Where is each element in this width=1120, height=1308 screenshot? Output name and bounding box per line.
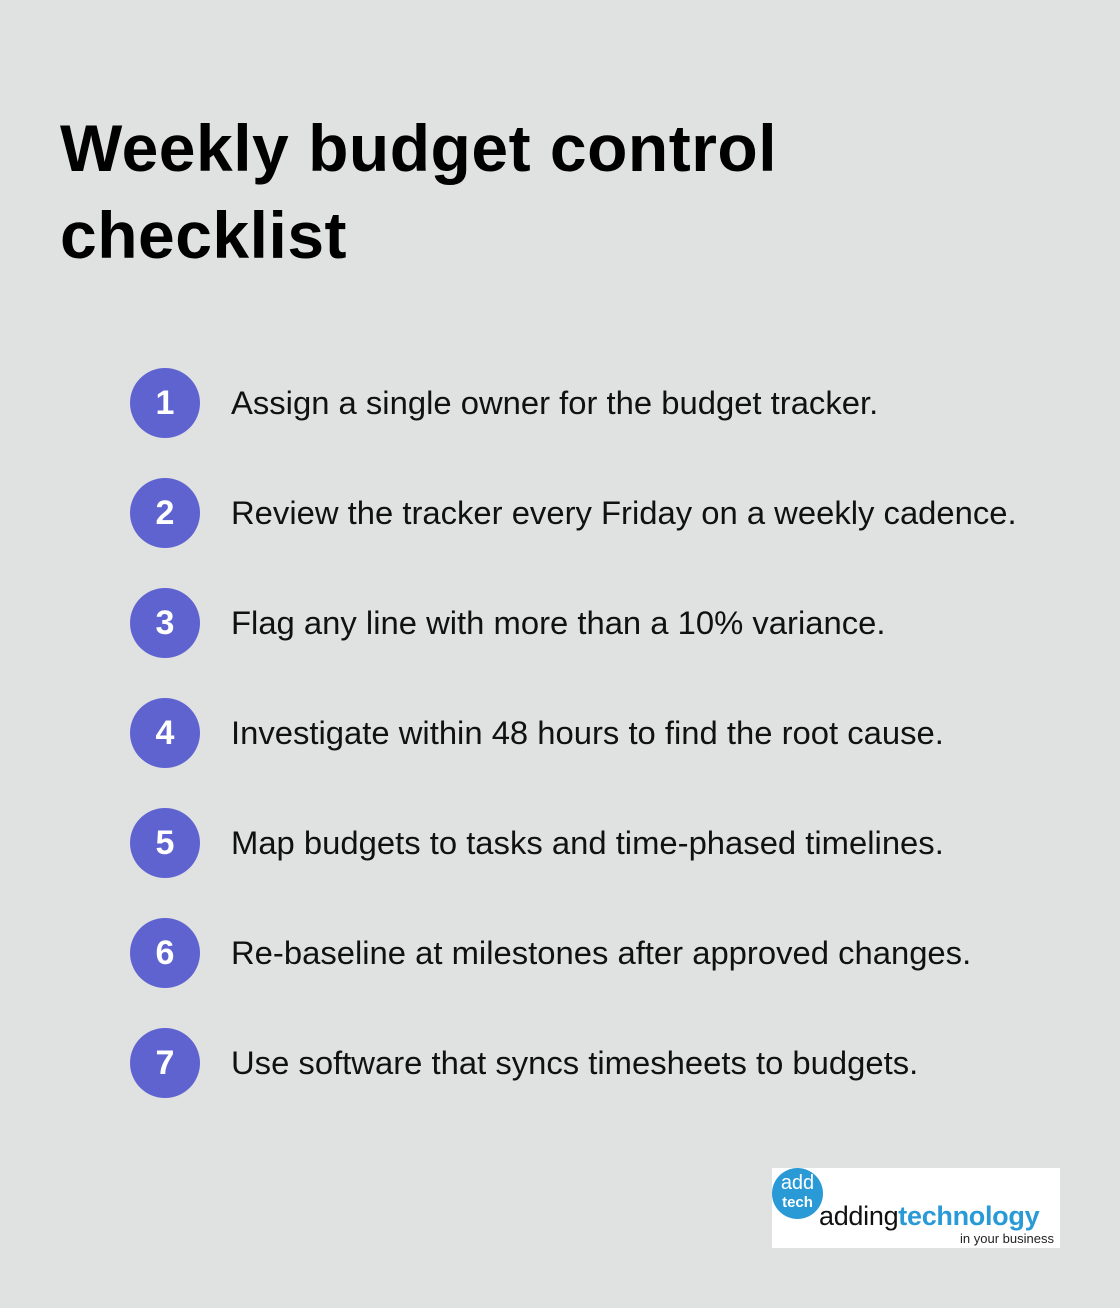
item 7: 7 xyxy=(156,1044,174,1082)
item 2 xyxy=(130,478,1017,548)
item 6: 6 xyxy=(156,934,174,972)
item 4 xyxy=(130,698,944,768)
item 4: 4 xyxy=(156,714,174,752)
item 6: Re-baseline at milestones after approved changes. xyxy=(231,934,971,971)
title xyxy=(60,111,777,272)
title: Weekly budget control xyxy=(60,111,777,185)
item 5: 5 xyxy=(156,824,174,862)
logo circle: add xyxy=(781,1172,814,1194)
logo circle xyxy=(772,1168,823,1219)
logo wordmark: addingtechnology xyxy=(819,1201,1039,1231)
item 1: 1 xyxy=(156,384,174,422)
logo xyxy=(772,1168,1060,1248)
item 3 xyxy=(130,588,885,658)
item 5: Map budgets to tasks and time-phased timelines. xyxy=(231,824,944,861)
item 1 xyxy=(130,368,878,438)
item 6 xyxy=(130,918,971,988)
logo tagline: in your business xyxy=(960,1231,1054,1246)
title: checklist xyxy=(60,198,347,272)
item 1: Assign a single owner for the budget tracker. xyxy=(231,384,878,421)
item 5 xyxy=(130,808,944,878)
item 7 xyxy=(130,1028,918,1098)
item 3: 3 xyxy=(156,604,174,642)
item 3: Flag any line with more than a 10% variance. xyxy=(231,604,885,641)
item 4: Investigate within 48 hours to find the root cause. xyxy=(231,714,944,751)
item 2: Review the tracker every Friday on a weekly cadence. xyxy=(231,494,1017,531)
item 2: 2 xyxy=(156,494,174,532)
logo circle: tech xyxy=(782,1194,813,1211)
item 7: Use software that syncs timesheets to budgets. xyxy=(231,1044,918,1081)
